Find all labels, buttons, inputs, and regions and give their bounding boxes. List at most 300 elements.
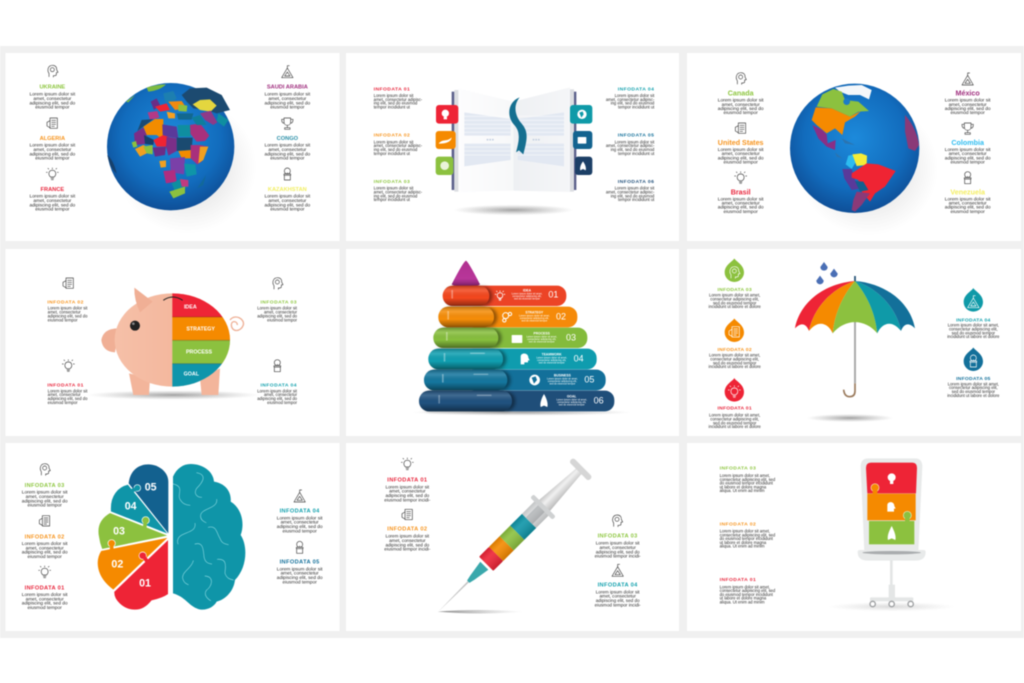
item 03: Lorem ipsum dolor sit amet, [709,293,760,298]
label: infodata 01: amet, consectetur [48,392,81,397]
row 5: BUSINESS [554,373,572,377]
label 04: eiusmod tempor incidi- [595,602,641,607]
item 02: Lorem ipsum dolor sit amet, [709,353,760,358]
label 02 [22,516,68,560]
label 02: Lorem ipsum dolor sit amet, [720,529,770,534]
item 03 [709,258,761,309]
right labels: amet, consectetur adipisc- [606,189,655,194]
label 03: aliqua. Ut enim ad minim [720,488,765,493]
left item 1: Ukraine: eiusmod tempor [35,104,70,110]
right item 1: Saudi Arabia: Lorem ipsum dolor sit [264,92,311,98]
left labels: INFODATA 02 [374,133,410,139]
brain left puzzle segments [97,464,168,610]
label 01 [384,458,431,502]
label 02: adipiscing elit, sed do [385,542,430,547]
left item 3: Brasil: adipiscing elit, sed do [718,205,764,211]
item 05 [947,347,1000,398]
left labels: tempor incididunt ut [374,197,411,202]
globe: Americas map [790,84,919,213]
right item 2: Colombia: adipiscing elit, sed do [945,155,991,161]
book [452,87,576,192]
row 4: consectetur adipiscing elit, [537,359,567,362]
item 04: sed do eiusmod tempor [952,330,996,335]
row 1: IDEA [523,288,532,292]
left item 3: France [29,168,76,212]
item 02: INFODATA 02 [718,347,752,353]
label 03 [22,464,68,509]
label 04: amet, consectetur [599,594,636,599]
label: infodata 03: adipiscing elit, sed do [257,313,298,318]
label: infodata 04: INFODATA 04 [260,382,297,388]
left item 2: Algeria: amet, consectetur [33,147,72,153]
right item 1: Saudi Arabia: adipiscing elit, sed do [264,100,311,106]
pig [101,288,244,395]
label 01: Lorem ipsum dolor sit [385,484,430,489]
label: infodata 04: adipiscing elit, sed do [257,396,298,401]
label 04 [277,490,323,534]
left item 3: France: Lorem ipsum dolor sit [29,194,76,200]
item 04: Lorem ipsum dolor sit amet, [948,323,999,328]
row 6 [419,391,614,411]
label 05: amet, consectetur [281,571,319,577]
row 1: 01 [548,290,558,300]
label 03 [720,466,775,493]
right item 1: Mexico: eiusmod tempor [951,110,985,116]
right item 1: Mexico: amet, consectetur [949,102,987,108]
left item 2: United States: eiusmod tempor [724,159,758,165]
brain left puzzle segments: 02 [111,558,123,570]
panel: piggy bank [6,249,340,436]
item 04: incididunt ut labore et dolore [947,334,1000,339]
label 04: Lorem ipsum dolor sit [596,589,640,594]
row 3: consectetur adipiscing elit, [527,338,557,341]
right item 2: Colombia [945,123,991,165]
panel: syringe [346,443,679,631]
label 02: Lorem ipsum dolor sit [385,534,430,539]
globe shadow [798,102,938,235]
label 01: INFODATA 01 [25,585,65,591]
label: infodata 02: amet, consectetur [48,310,81,315]
chair shadow [828,602,955,611]
left item 3: Brasil [718,172,764,215]
label 04: adipiscing elit, sed do [277,524,323,530]
umbrella [795,276,915,397]
item 05: Lorem ipsum dolor sit amet, [948,381,999,386]
label 03: eiusmod tempor [28,503,62,509]
item 01 [709,378,761,429]
right labels: amet, consectetur adipisc- [606,97,655,102]
chair [858,458,926,607]
item 02: consectetur adipiscing elit, [710,356,759,361]
row 6: Lorem ipsum dolor sit amet, [556,399,587,402]
left item 2: United States: United States [718,139,764,147]
label: infodata 01: eiusmod tempor [48,400,78,405]
label 03: amet, consectetur [599,545,636,550]
right item 3: Venezuela: adipiscing elit, sed do [945,205,991,211]
left labels: INFODATA 01 [374,86,410,92]
left labels [374,86,423,202]
item 01: Lorem ipsum dolor sit amet, [709,413,760,418]
right item 3: Venezuela: eiusmod tempor [951,209,985,215]
label 02: Lorem ipsum dolor sit [22,541,68,547]
globe shadow [117,100,257,233]
right item 3: Venezuela: Lorem ipsum dolor sit [945,196,991,202]
item 01: consectetur adipiscing elit, [710,416,759,421]
item 03: consectetur adipiscing elit, [710,296,759,301]
row 2: 02 [556,312,566,322]
right item 1: Mexico [945,73,991,116]
row 6: 06 [594,395,604,405]
right labels: Lorem ipsum dolor sit [615,139,655,144]
row 3: Lorem ipsum dolor sit amet, [526,336,557,339]
tab icons right [570,105,592,175]
row 4: TEAMWORK [542,352,562,356]
label: infodata 01: INFODATA 01 [47,382,84,388]
row 1: sed do eiusmod tempor [514,297,540,300]
label 02: eiusmod tempor incidi- [384,547,431,552]
row 4 [428,349,597,369]
right labels [606,86,655,202]
right item 1: Saudi Arabia: amet, consectetur [268,96,307,102]
left item 2: Algeria: eiusmod tempor [35,155,70,161]
left item 1: Ukraine: UKRAINE [39,85,65,91]
right item 2: Colombia: Colombia [951,139,985,147]
left item 3: Brasil: Brasil [731,188,751,196]
left labels: ing elit, sed do eiusmod [374,101,418,106]
right item 1: Saudi Arabia [264,66,311,110]
item 04: consectetur adipiscing elit, [949,326,998,331]
left item 2: Algeria: adipiscing elit, sed do [29,151,76,157]
right labels: ing elit, sed do eiusmod [611,147,655,152]
item 04 [947,288,1000,339]
label: infodata 03 [257,278,298,322]
label 02: aliqua. Ut enim ad minim [720,544,765,549]
label 01: INFODATA 01 [387,478,427,484]
right item 1: Saudi Arabia: eiusmod tempor [270,104,305,110]
left item 1: Canada [718,73,764,116]
label 04: INFODATA 04 [280,509,320,515]
pig: PROCESS [186,350,212,356]
label 04: amet, consectetur [281,520,319,526]
right item 3: Venezuela [945,172,991,215]
panel: brain [6,443,340,631]
right item 3: Kazakhstan: KAZAKHSTAN [268,187,307,193]
label 01: eiusmod tempor incidi- [384,497,431,502]
right labels: amet, consectetur adipisc- [606,143,655,148]
left item 1: Canada: amet, consectetur [722,102,760,108]
row 2 [438,307,577,327]
label 03: ut labore et dolore magna [720,484,767,489]
left item 1: Ukraine [29,65,76,110]
row 1: Lorem ipsum dolor sit amet, [512,293,543,296]
item 03: incididunt ut labore et dolore [709,304,761,309]
label 05: adipiscing elit, sed do [277,575,323,581]
label 04 [595,564,641,607]
label 02: do eiusmod tempor incididunt [720,536,774,541]
ground shadow [87,390,260,400]
right item 2: Congo: eiusmod tempor [270,155,305,161]
label 02: consectetur adipiscing elit, sed [720,532,775,537]
umbrella shadow [807,414,893,422]
label 03: eiusmod tempor incidi- [595,554,641,559]
left item 2: United States: amet, consectetur [722,151,760,157]
left item 2: Algeria: Lorem ipsum dolor sit [29,143,76,149]
label 03: amet, consectetur [26,494,64,500]
right item 2: Congo: Lorem ipsum dolor sit [264,143,311,149]
right item 1: Mexico: México [956,90,980,98]
left item 1: Canada: adipiscing elit, sed do [718,106,764,112]
label: infodata 02: Lorem ipsum dolor sit [48,306,88,311]
label: infodata 02: INFODATA 02 [47,300,84,306]
label 03: INFODATA 03 [598,534,638,540]
right item 3: Kazakhstan: amet, consectetur [268,198,307,204]
right labels: tempor incididunt ut [618,197,655,202]
right item 1: Mexico: Lorem ipsum dolor sit [945,98,991,104]
right item 3: Kazakhstan: adipiscing elit, sed do [264,202,311,208]
row 4: 04 [574,354,584,364]
label 02 [720,521,775,549]
base shadow [412,409,632,416]
row 5: 05 [584,374,594,384]
item 01: sed do eiusmod tempor [713,420,757,425]
left item 3: Brasil: Lorem ipsum dolor sit [718,196,764,202]
brain left puzzle segments: 04 [125,500,137,512]
syringe shadow [438,610,525,613]
label 05: Lorem ipsum dolor sit [277,566,323,572]
item 01: incididunt ut labore et dolore [709,424,761,429]
row 3 [433,328,587,348]
right item 2: Congo: adipiscing elit, sed do [264,151,311,157]
label 01: amet, consectetur [26,596,64,602]
label 01: INFODATA 01 [720,577,756,583]
left labels: tempor incididunt ut [374,104,411,109]
left labels: amet, consectetur adipisc- [374,97,423,102]
row 6: GOAL [567,394,576,398]
row 5: consectetur adipiscing elit, [548,380,577,383]
label 03: INFODATA 03 [25,483,65,489]
row 2: sed do eiusmod tempor [521,319,547,322]
left item 3: France: eiusmod tempor [35,206,70,212]
label 02: amet, consectetur [389,538,426,543]
cone [452,261,480,286]
item 03: sed do eiusmod tempor [713,300,757,305]
left item 1: Canada: Canada [728,90,755,98]
label: infodata 03: Lorem ipsum dolor sit [257,306,298,311]
row 6: sed do eiusmod tempor [559,403,585,406]
label 03: consectetur adipiscing elit, sed [720,477,775,482]
label 03: adipiscing elit, sed do [22,498,68,504]
label 05: eiusmod tempor [283,579,317,585]
row 5: sed do eiusmod tempor [549,382,575,385]
row 6: consectetur adipiscing elit, [557,401,587,404]
right item 3: Venezuela: amet, consectetur [949,200,987,206]
left labels: tempor incididunt ut [374,151,411,156]
label 01 [22,566,68,611]
book shadow [453,205,573,215]
tab icons left [436,105,458,175]
panel: Africa globe [6,53,340,241]
right labels: INFODATA 06 [618,179,654,185]
label: infodata 02: adipiscing elit, sed do [48,313,88,318]
label 02: adipiscing elit, sed do [22,550,68,556]
left item 3: Brasil: eiusmod tempor [724,209,758,215]
globe: Africa map [107,83,234,210]
label: infodata 01: adipiscing elit, sed do [48,396,88,401]
label 01: aliqua. Ut enim ad minim [720,599,765,604]
right item 3: Kazakhstan [264,168,311,212]
label 01: ut labore et dolore magna [720,596,767,601]
row 4: sed do eiusmod tempor [539,361,565,364]
right item 2: Congo: amet, consectetur [268,147,307,153]
label 03: adipiscing elit, sed do [596,549,640,554]
label 01: eiusmod tempor [28,605,62,611]
label 01: adipiscing elit, sed do [385,493,430,498]
right labels: tempor incididunt ut [618,104,655,109]
label 01: Lorem ipsum dolor sit [22,592,68,598]
left labels: Lorem ipsum dolor sit [374,186,414,191]
label: infodata 01 [47,360,88,405]
item 05: consectetur adipiscing elit, [949,385,998,390]
row 1 [443,286,566,306]
left item 2: United States: Lorem ipsum dolor sit [718,147,764,153]
label: infodata 03: INFODATA 03 [260,300,297,306]
brain left puzzle segments: 05 [145,481,157,493]
left item 3: Brasil: amet, consectetur [722,200,760,206]
panel: office chair [687,443,1021,631]
label 04: INFODATA 04 [598,583,638,589]
label 02: amet, consectetur [26,545,64,551]
left labels: INFODATA 03 [374,179,410,185]
right labels: tempor incididunt ut [618,151,655,156]
label: infodata 04: eiusmod tempor [267,400,298,405]
label 03: do eiusmod tempor incididunt [720,481,774,486]
left item 1: Canada: eiusmod tempor [724,110,758,116]
pig: GOAL [184,372,200,378]
pig: STRATEGY [186,326,215,332]
label 01 [720,577,775,604]
left labels: amet, consectetur adipisc- [374,143,423,148]
label 02: INFODATA 02 [720,521,756,527]
left item 2: Algeria: ALGERIA [40,136,65,142]
item 05: sed do eiusmod tempor [952,389,996,394]
item 05: INFODATA 05 [956,376,990,382]
right labels: ing elit, sed do eiusmod [611,193,655,198]
row 3: PROCESS [534,331,551,335]
label: infodata 03: amet, consectetur [264,310,298,315]
item 02 [709,318,761,369]
panel: ring pyramid [346,249,679,436]
label 02 [384,509,431,552]
left item 1: Canada: Lorem ipsum dolor sit [718,98,764,104]
label 01: Lorem ipsum dolor sit amet, [720,584,770,589]
label 02: INFODATA 02 [387,527,427,533]
left labels: Lorem ipsum dolor sit [374,93,414,98]
left item 3: France: amet, consectetur [33,198,72,204]
left item 1: Ukraine: amet, consectetur [33,96,72,102]
right labels: INFODATA 05 [618,133,654,139]
label 02: ut labore et dolore magna [720,540,767,545]
syringe [427,456,594,623]
right labels: ing elit, sed do eiusmod [611,101,655,106]
right item 3: Kazakhstan: eiusmod tempor [270,206,305,212]
right item 1: Mexico: adipiscing elit, sed do [945,106,991,112]
left labels: ing elit, sed do eiusmod [374,147,418,152]
row 3: 03 [566,333,576,343]
right labels: Lorem ipsum dolor sit [615,186,655,191]
right item 2: Colombia: eiusmod tempor [951,159,985,165]
item 03: INFODATA 03 [718,287,752,293]
row 1: consectetur adipiscing elit, [512,295,542,298]
label: infodata 03: eiusmod tempor [267,317,298,322]
label 03: INFODATA 03 [720,466,756,472]
label: infodata 04: amet, consectetur [264,392,298,397]
item 02: sed do eiusmod tempor [713,360,757,365]
right item 2: Congo: CONGO [277,136,299,142]
ribbon [509,97,527,154]
label 03: Lorem ipsum dolor sit [22,490,68,496]
left labels: Lorem ipsum dolor sit [374,139,414,144]
left item 2: Algeria [29,118,76,161]
label: infodata 04: Lorem ipsum dolor sit [257,388,298,393]
item 05: incididunt ut labore et dolore [947,393,1000,398]
label 01: adipiscing elit, sed do [22,601,68,607]
label: infodata 01: Lorem ipsum dolor sit [48,388,88,393]
label 02: INFODATA 02 [25,534,65,540]
left item 2: United States: adipiscing elit, sed do [718,155,764,161]
label 03 [595,515,641,559]
left item 3: France: FRANCE [41,187,64,193]
panel: Americas globe [687,53,1021,241]
panel: open book [346,53,679,241]
right item 3: Kazakhstan: Lorem ipsum dolor sit [264,194,311,200]
row 2: Lorem ipsum dolor sit amet, [519,315,550,318]
row 2: consectetur adipiscing elit, [520,317,549,320]
brain left puzzle segments: 03 [113,526,125,538]
panel: umbrella [687,249,1021,436]
brain left puzzle segments: 01 [139,578,151,590]
left item 3: France: adipiscing elit, sed do [29,202,76,208]
item 01: INFODATA 01 [718,405,752,411]
right item 2: Colombia: amet, consectetur [949,151,987,157]
label 05: INFODATA 05 [280,559,320,565]
label 04: Lorem ipsum dolor sit [277,515,323,521]
right labels: Lorem ipsum dolor sit [615,93,655,98]
left item 2: United States [718,123,764,165]
label 01: consectetur adipiscing elit, sed [720,588,775,593]
item 02: incididunt ut labore et dolore [709,364,761,369]
label 03: Lorem ipsum dolor sit [596,541,640,546]
label 05 [277,541,323,585]
row 2: STRATEGY [525,310,544,314]
row 4: Lorem ipsum dolor sit amet, [536,357,567,360]
left labels: ing elit, sed do eiusmod [374,193,418,198]
brain right hemisphere [173,464,245,610]
right item 1: Saudi Arabia: SAUDI ARABIA [267,85,308,91]
label 04: adipiscing elit, sed do [596,598,640,603]
left labels: amet, consectetur adipisc- [374,189,423,194]
rain drops [816,262,838,284]
row 3: sed do eiusmod tempor [529,340,555,343]
label: infodata 02: eiusmod tempor [48,317,78,322]
right labels: INFODATA 04 [618,86,654,92]
item 04: INFODATA 04 [956,317,990,323]
label 01: amet, consectetur [389,489,426,494]
right item 2: Congo [264,118,311,161]
right item 3: Venezuela: Venezuela [950,188,986,196]
label 04: eiusmod tempor [283,528,317,534]
label: infodata 02 [47,278,88,322]
pig: IDEA [184,304,197,310]
